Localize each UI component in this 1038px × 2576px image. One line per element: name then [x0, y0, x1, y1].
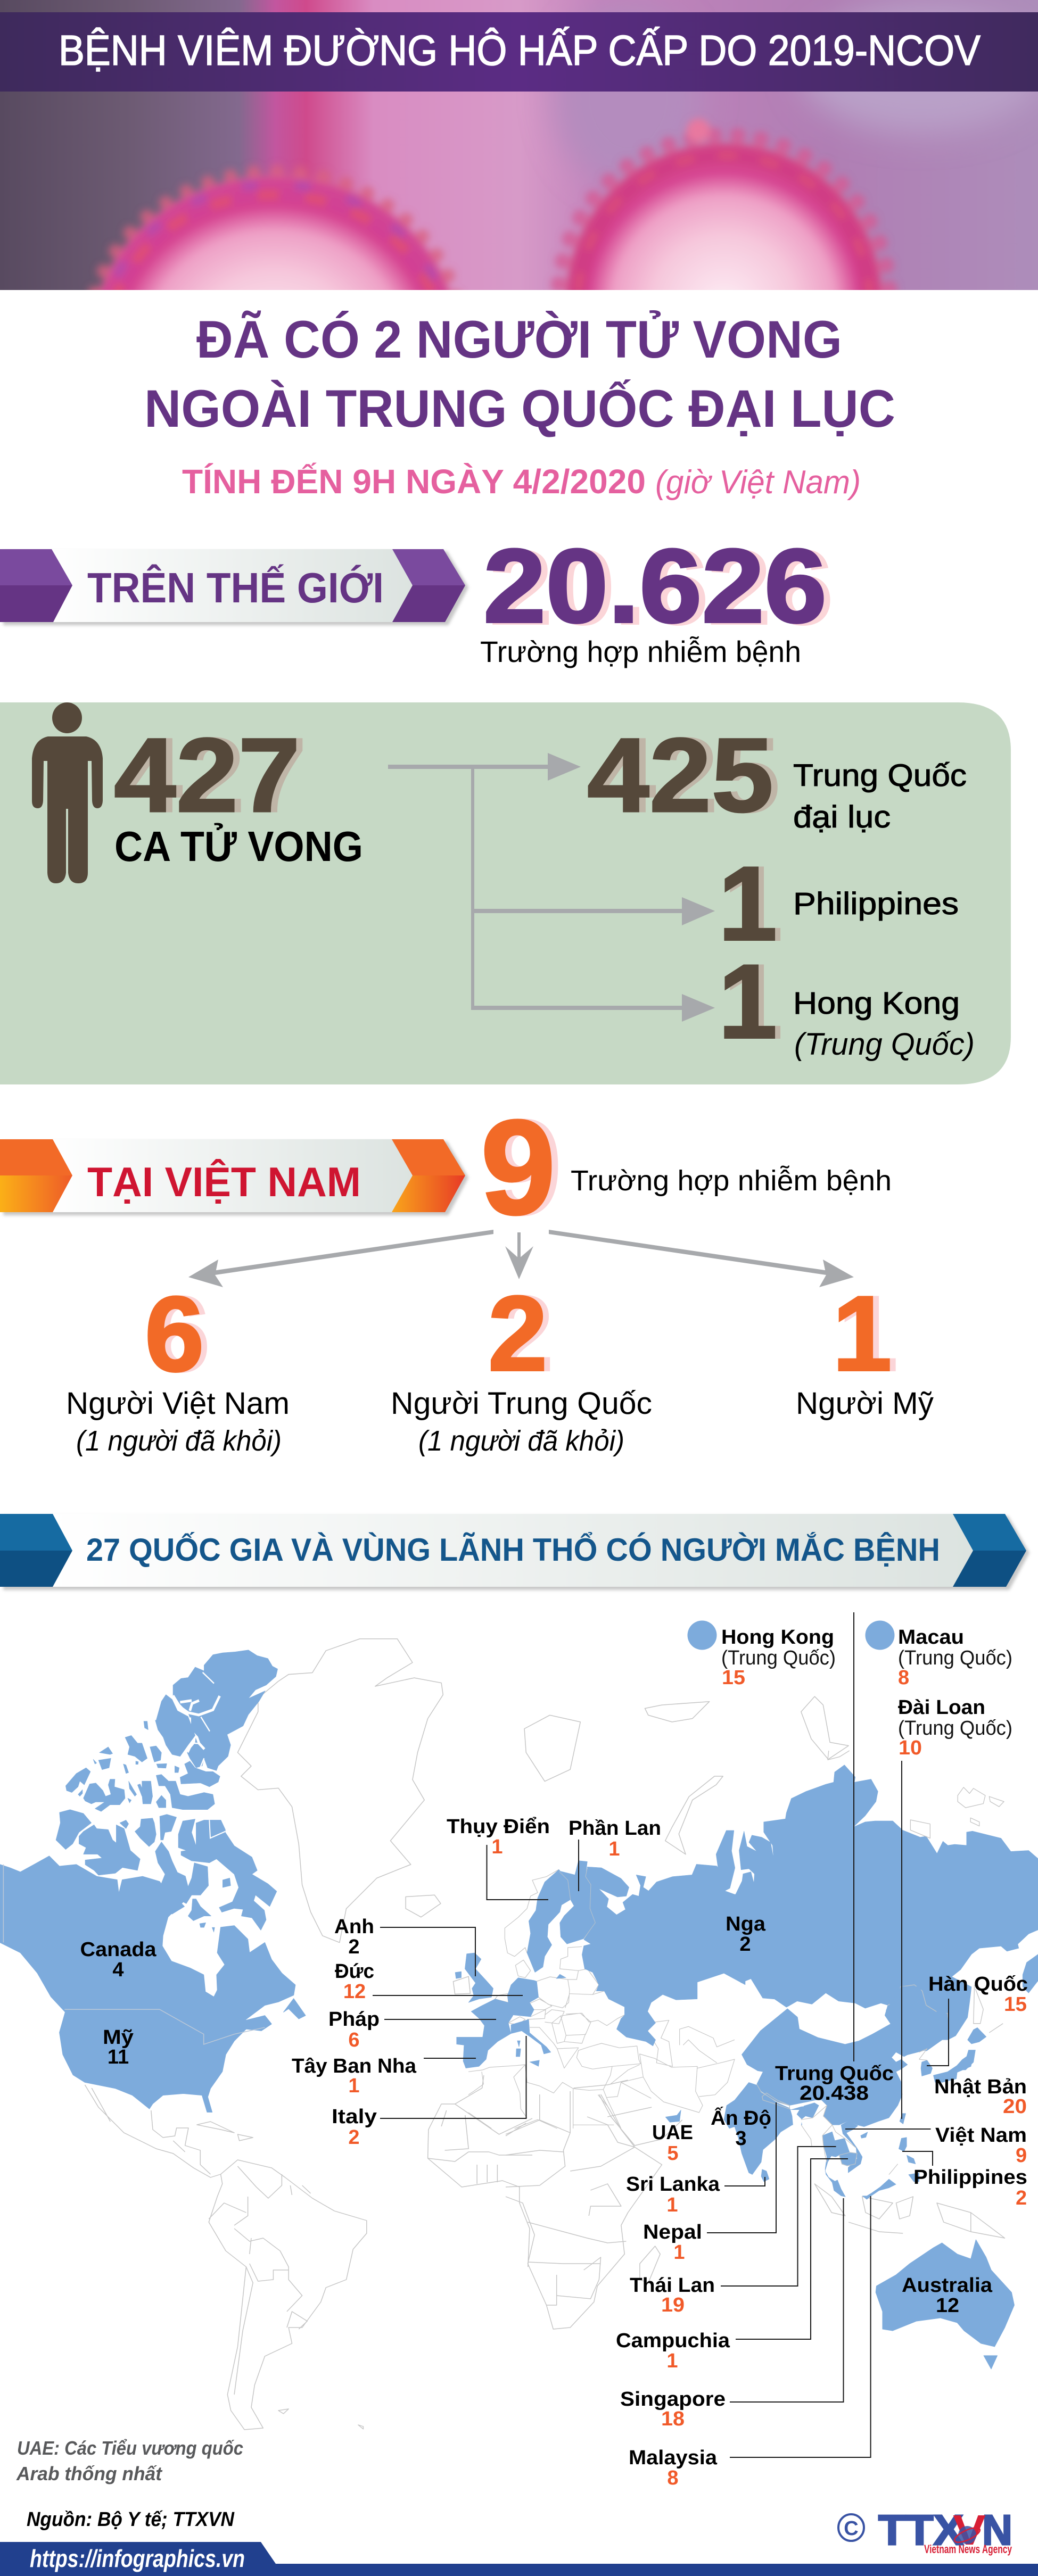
main heading: NGOÀI TRUNG QUỐC ĐẠI LỤC — [144, 379, 895, 438]
label: Tây Ban Nha: 1 — [348, 2075, 360, 2097]
label: Nga: 2 — [739, 1933, 751, 1956]
label: Trung Quốc đại lục: đại lục — [793, 800, 891, 834]
logo: copyright and TTXVN: N — [982, 2506, 1012, 2554]
label: Nga — [726, 1913, 766, 1956]
label: Hong Kong: Hong Kong — [721, 1626, 834, 1649]
label: Canada: Canada — [80, 1939, 156, 1961]
label: Australia: Australia — [902, 2274, 993, 2297]
425 number: 425 — [587, 716, 773, 834]
footer bar: https://infographics.vn — [30, 2545, 245, 2572]
date subtitle: TÍNH ĐẾN 9H NGÀY 4/2/2020 — [182, 462, 646, 501]
label: Pháp: 6 — [348, 2029, 360, 2051]
label: Sri Lanka — [626, 2173, 720, 2216]
breakdown: Người Mỹ — [796, 1274, 934, 1421]
label: Malaysia: Malaysia — [629, 2447, 718, 2469]
label: Thụy Điển: 1 — [491, 1836, 503, 1858]
breakdown: Người Mỹ: Người Mỹ — [796, 1386, 934, 1421]
label: Philippines: Philippines — [913, 2166, 1027, 2189]
ribbon: world — [0, 549, 468, 625]
label: Canada: 4 — [112, 1959, 124, 1981]
world cases caption: Trường hợp nhiễm bệnh — [480, 635, 801, 668]
map: Yamal and Japan — [716, 1830, 974, 2076]
UAE note — [16, 2437, 243, 2484]
label: Ấn Độ: Ấn Độ — [711, 2106, 771, 2130]
breakdown: Người Trung Quốc: (1 người đã khỏi) — [418, 1425, 624, 1457]
label: Đức: 12 — [343, 1981, 366, 2003]
label: Nepal: 1 — [673, 2241, 685, 2264]
breakdown: Người Trung Quốc: Người Trung Quốc — [391, 1386, 652, 1421]
label: Philippines: Philippines — [793, 887, 959, 921]
label: Malaysia — [629, 2447, 718, 2489]
leader lines — [373, 1612, 949, 2457]
map: Australia — [876, 2240, 1014, 2369]
label: Nhật Bản — [934, 2076, 1027, 2118]
UAE note: UAE: Các Tiểu vương quốc — [17, 2437, 243, 2459]
breakdown: Người Mỹ: 1 — [833, 1274, 892, 1393]
label: Singapore: Singapore — [620, 2388, 726, 2411]
world map — [0, 1639, 1038, 2430]
label: Việt Nam — [935, 2124, 1027, 2167]
label: Ấn Độ: 3 — [735, 2127, 747, 2150]
ribbon: countries: 27 QUỐC GIA VÀ VÙNG LÃNH THỔ CÓ NGƯỜI MẮC BỆNH — [86, 1532, 940, 1568]
footer bar — [0, 2542, 1038, 2576]
header image: virus — [0, 0, 1038, 290]
label: Macau — [866, 1621, 1012, 1689]
label: Việt Nam: 9 — [1016, 2144, 1027, 2167]
label: Philippines: 2 — [1016, 2187, 1027, 2209]
deaths label: CA TỬ VONG — [114, 823, 363, 870]
panel: deaths — [0, 702, 1011, 1084]
label: Philippines — [913, 2166, 1027, 2209]
number 1 Philippines: 1 — [719, 845, 777, 962]
date subtitle: (giờ Việt Nam) — [655, 464, 861, 501]
label: Hong Kong: (Trung Quốc) — [794, 1027, 975, 1062]
number 1 Hong Kong: 1 — [724, 943, 782, 1060]
label: Phần Lan: 1 — [608, 1838, 620, 1860]
label: Phần Lan — [569, 1817, 661, 1860]
source: Nguồn: Bộ Y tế; TTXVN — [27, 2508, 235, 2531]
label: Tây Ban Nha — [292, 2055, 417, 2097]
map: Canadian Arctic — [56, 1650, 278, 1932]
label: Anh: 2 — [348, 1936, 360, 1958]
label: Malaysia: 8 — [667, 2467, 679, 2489]
label: Australia: 12 — [936, 2295, 959, 2317]
427 number: 427 — [114, 716, 300, 834]
label: Sri Lanka: Sri Lanka — [626, 2173, 720, 2196]
label: Đài Loan: 10 — [899, 1737, 922, 1759]
label: Campuchia — [616, 2330, 730, 2372]
label: Hàn Quốc — [928, 1973, 1028, 2016]
label: Thái Lan: Thái Lan — [630, 2274, 715, 2297]
label: Macau: (Trung Quốc) — [898, 1647, 1012, 1669]
label: Campuchia: 1 — [666, 2350, 678, 2372]
label: Trung Quốc — [775, 2063, 894, 2105]
label: Đức: Đức — [335, 1960, 374, 1983]
ribbon: Vietnam — [0, 1139, 468, 1215]
breakdown: Người Việt Nam: 6 — [151, 1275, 210, 1394]
label: Mỹ — [103, 2026, 134, 2068]
label: Pháp — [328, 2008, 380, 2051]
label: Hong Kong: 15 — [722, 1667, 745, 1689]
title band — [0, 12, 1038, 92]
label: Hàn Quốc: Hàn Quốc — [928, 1973, 1028, 1995]
label: Macau: Macau — [898, 1626, 964, 1649]
label: Việt Nam: Việt Nam — [935, 2124, 1027, 2147]
ribbon: countries — [0, 1514, 1029, 1590]
label: Thái Lan: 19 — [661, 2294, 685, 2316]
arrows — [388, 753, 715, 1022]
breakdown: Người Việt Nam: Người Việt Nam — [66, 1386, 290, 1421]
number 1 Philippines: 1 — [724, 845, 782, 962]
ribbon: Vietnam: TẠI VIỆT NAM — [87, 1158, 361, 1205]
logo: copyright and TTXVN: V — [953, 2506, 986, 2554]
Vietnam cases number: 9 — [487, 1092, 562, 1243]
map: Africa and Asia outlines — [506, 2080, 1005, 2329]
logo: copyright and TTXVN: TTX — [878, 2506, 963, 2554]
breakdown: Người Trung Quốc — [391, 1274, 652, 1457]
label: Singapore — [620, 2388, 726, 2430]
map: central and south America — [85, 2075, 532, 2430]
UAE note: Arab thống nhất — [16, 2463, 163, 2484]
world cases number: 20.626 — [490, 529, 833, 646]
logo: copyright and TTXVN: C — [844, 2517, 859, 2540]
ribbon: world: TRÊN THẾ GIỚI — [87, 564, 384, 611]
main heading — [144, 310, 895, 438]
425 number: 425 — [594, 716, 780, 834]
label: Italy: 2 — [348, 2126, 360, 2149]
breakdown: Người Trung Quốc: 2 — [494, 1274, 553, 1393]
world cases number: 20.626 — [483, 527, 827, 644]
427 number: 427 — [120, 716, 307, 834]
label: Hàn Quốc: 15 — [1004, 1993, 1027, 2016]
label: Canada — [80, 1939, 156, 1981]
label: UAE — [652, 2122, 693, 2165]
label: Nhật Bản: Nhật Bản — [934, 2076, 1027, 2098]
breakdown: Người Việt Nam: (1 người đã khỏi) — [76, 1425, 282, 1457]
label: Italy: Italy — [332, 2106, 377, 2128]
map: Europe — [455, 1861, 745, 2128]
label: Trung Quốc đại lục — [793, 758, 967, 834]
label: Trung Quốc đại lục: Trung Quốc — [793, 758, 967, 793]
label: Tây Ban Nha: Tây Ban Nha — [292, 2055, 417, 2077]
label: Nhật Bản: 20 — [1003, 2095, 1027, 2118]
map: China, India, SE Asia — [724, 1986, 958, 2199]
label: UAE: UAE — [652, 2122, 693, 2144]
label: UAE: 5 — [667, 2142, 679, 2165]
date subtitle — [182, 462, 861, 501]
label: Nepal: Nepal — [643, 2221, 702, 2243]
icon: person — [32, 702, 103, 883]
label: Mỹ: 11 — [108, 2046, 129, 2068]
label: Hong Kong — [793, 986, 975, 1062]
map: North America mainland and Greenland — [0, 1639, 470, 2112]
label: Anh — [334, 1916, 374, 1958]
label: Mỹ: Mỹ — [103, 2026, 134, 2049]
label: Thụy Điển: Thụy Điển — [447, 1816, 550, 1838]
label: Ấn Độ — [711, 2106, 771, 2150]
map: Arctic islands outline — [524, 1696, 848, 1854]
label: Thụy Điển — [447, 1816, 550, 1858]
label: Đài Loan: Đài Loan — [898, 1696, 985, 1719]
logo: copyright and TTXVN — [838, 2506, 1012, 2556]
arrows from 9 — [188, 1230, 854, 1287]
label: Thái Lan — [630, 2274, 715, 2316]
label: Hong Kong: (Trung Quốc) — [721, 1647, 836, 1669]
map: Russia east — [735, 1751, 1038, 2070]
label: Trung Quốc: 20.438 — [800, 2082, 869, 2105]
title band: BỆNH VIÊM ĐƯỜNG HÔ HẤP CẤP DO 2019-NCOV — [59, 27, 981, 74]
label: Italy — [332, 2106, 377, 2149]
label: Campuchia: Campuchia — [616, 2330, 730, 2352]
label: Phần Lan: Phần Lan — [569, 1817, 661, 1840]
Vietnam cases number: 9 — [481, 1092, 556, 1243]
label: Sri Lanka: 1 — [666, 2194, 678, 2216]
label: Trung Quốc: Trung Quốc — [775, 2063, 894, 2085]
breakdown: Người Mỹ: 1 — [838, 1274, 897, 1393]
breakdown: Người Trung Quốc: 2 — [488, 1274, 547, 1393]
label: Australia — [902, 2274, 993, 2317]
label: Singapore: 18 — [661, 2408, 685, 2430]
breakdown: Người Việt Nam: 6 — [145, 1275, 204, 1394]
label: Đài Loan: (Trung Quốc) — [898, 1717, 1012, 1740]
Vietnam cases caption: Trường hợp nhiễm bệnh — [571, 1165, 892, 1197]
label: Macau: 8 — [898, 1667, 909, 1689]
label: Nepal — [643, 2221, 702, 2264]
breakdown: Người Việt Nam — [66, 1275, 290, 1457]
label: Pháp: Pháp — [328, 2008, 380, 2031]
label: Nga: Nga — [726, 1913, 766, 1935]
label: Đức — [335, 1960, 374, 2003]
label: Anh: Anh — [334, 1916, 374, 1938]
label: Hong Kong — [688, 1621, 836, 1689]
main heading: ĐÃ CÓ 2 NGƯỜI TỬ VONG — [196, 310, 842, 369]
label: Đài Loan — [898, 1696, 1012, 1759]
label: Hong Kong: Hong Kong — [793, 986, 960, 1021]
number 1 Hong Kong: 1 — [719, 943, 777, 1060]
